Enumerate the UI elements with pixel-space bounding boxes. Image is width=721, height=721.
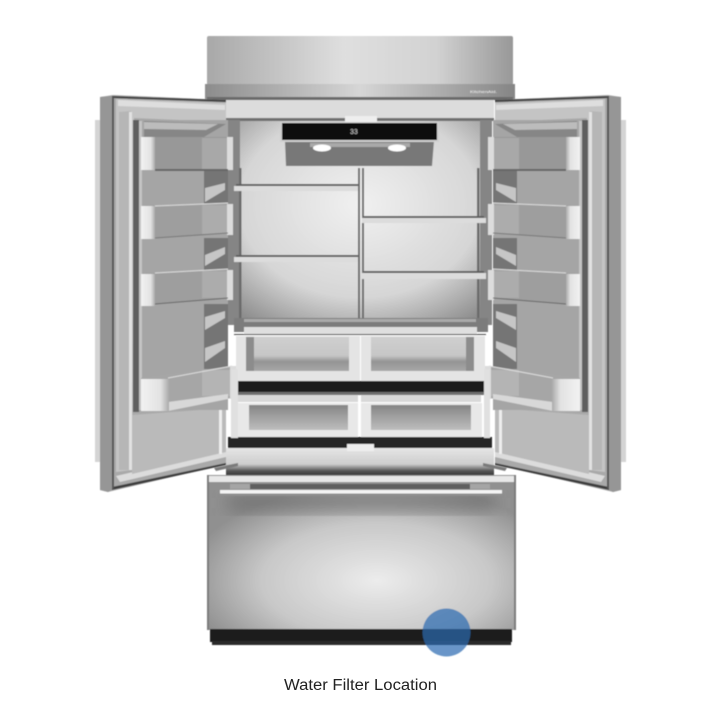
fridge interior <box>226 118 494 325</box>
control panel and light hood <box>280 116 439 166</box>
left lower shelf <box>234 255 358 262</box>
shelf rails <box>239 168 480 323</box>
right door <box>485 95 626 492</box>
upper interior header band <box>226 100 494 119</box>
hood lights <box>313 144 331 152</box>
top grille cap <box>205 36 515 100</box>
brand badge: KitchenAid. <box>470 89 497 94</box>
lower drawer left <box>238 403 358 437</box>
drawer handle <box>220 484 502 496</box>
dark gap <box>237 381 484 395</box>
display temperature: 33 <box>350 129 358 136</box>
bottom freezer drawer <box>207 475 516 630</box>
lower dark gap and centre hinge band <box>226 437 494 475</box>
caption: Water Filter Location <box>284 677 437 694</box>
refrigerator <box>95 36 626 656</box>
right lower shelf <box>362 271 486 279</box>
left upper shelf <box>234 184 358 191</box>
door hinges <box>214 463 507 471</box>
water filter highlight circle <box>422 608 470 656</box>
lower drawer bands <box>238 395 358 402</box>
upper drawer left <box>236 336 360 381</box>
crisper cover glass <box>234 318 488 335</box>
upper drawer right <box>361 336 485 381</box>
lower drawer right <box>361 403 482 437</box>
right upper shelf <box>362 216 486 223</box>
black toe kick <box>210 629 512 645</box>
crisper side trim <box>231 369 490 438</box>
left door <box>95 95 236 492</box>
